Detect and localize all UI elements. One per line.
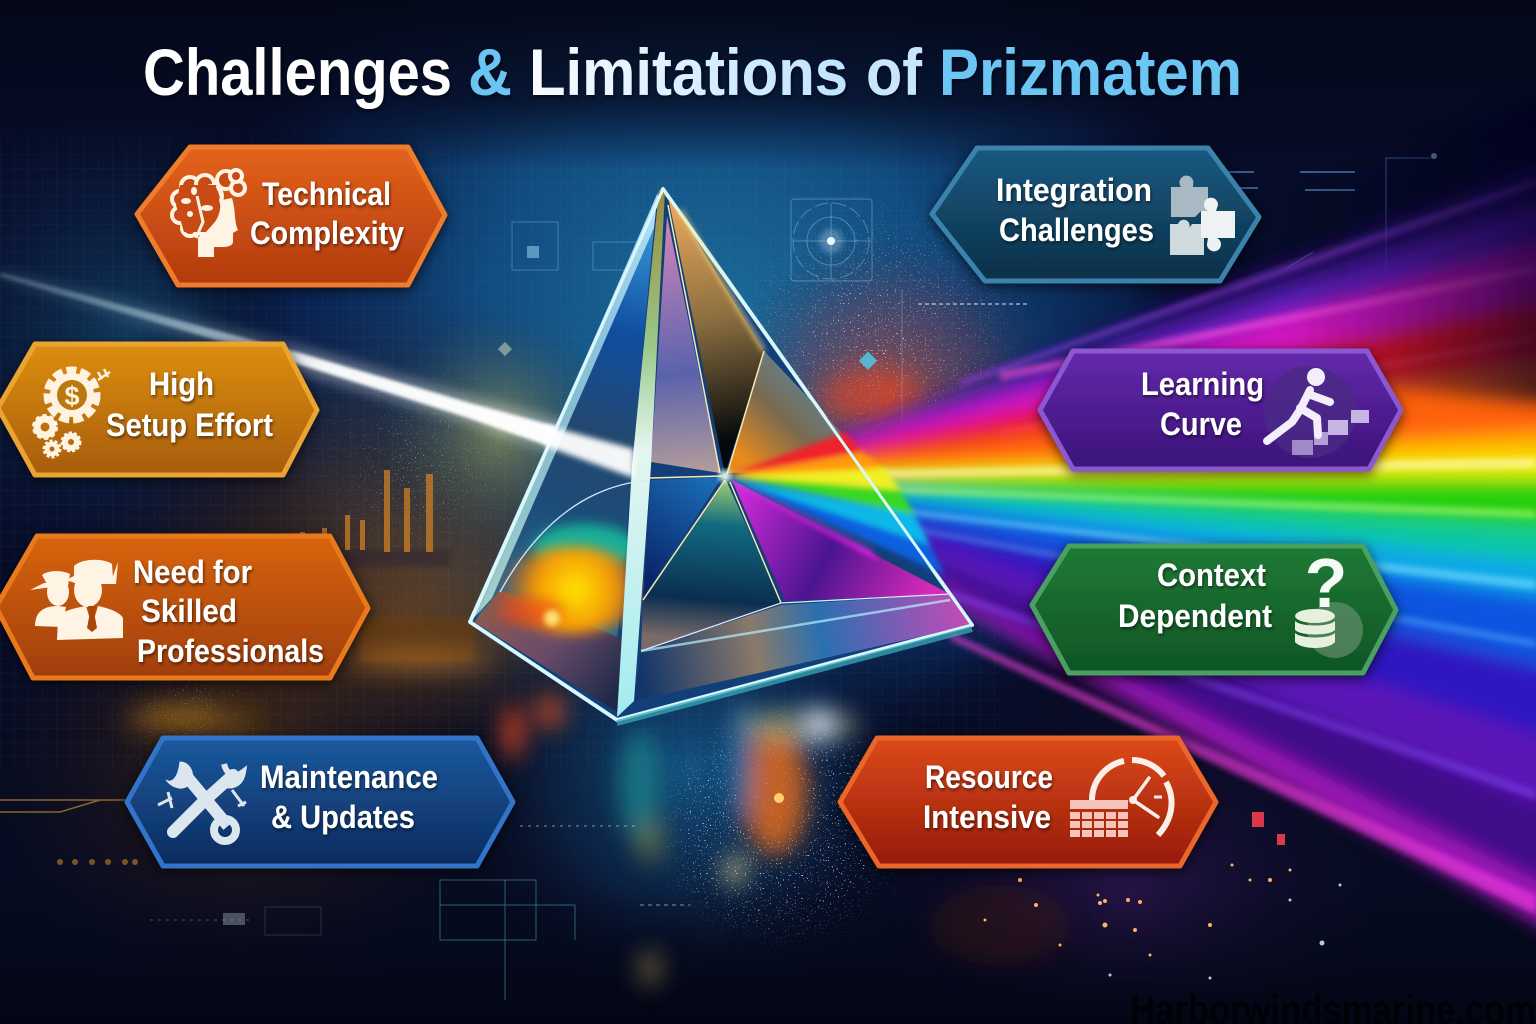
white incoming light beam [0, 266, 640, 482]
label: Integration [996, 172, 1152, 208]
panel: Need for Skilled Professionals: Professionals [137, 633, 324, 669]
prism: translucent base band [634, 594, 972, 701]
label: Maintenance [260, 759, 438, 795]
icon: gauge and calendar [1070, 760, 1172, 837]
ray streaks [820, 178, 1536, 914]
prism: bright edges [470, 189, 972, 723]
background chart bars [270, 470, 450, 566]
glass prism [470, 189, 972, 723]
white beam inside prism [545, 425, 634, 478]
panel: Technical Complexity [137, 147, 445, 285]
panel: Context Dependent [1032, 544, 1396, 673]
icon: person climbing stairs [1264, 366, 1369, 458]
panel: Learning Curve: Curve [1160, 406, 1242, 442]
floor glow and reflections [120, 369, 1070, 986]
label: Learning [1141, 366, 1264, 402]
prism: left rim [472, 192, 658, 620]
prism: front ridge band [617, 190, 665, 717]
HUD top right lines [1218, 153, 1437, 278]
icon: brain and head [172, 170, 245, 257]
panel: Need for Skilled Professionals: Skilled [141, 593, 237, 629]
title: Challenges [143, 35, 452, 109]
panel: Learning Curve [1040, 351, 1401, 469]
title: Limitations [529, 35, 848, 109]
label: Context [1157, 557, 1266, 593]
HUD small panels [498, 222, 1028, 470]
title: Prizmatem [939, 35, 1242, 109]
prism: lower left base facet [474, 590, 625, 712]
prism: gold rear facet [667, 192, 764, 474]
title: of [866, 35, 923, 109]
label: Resource [925, 759, 1053, 795]
icon: crossed wrench and screwdriver [158, 762, 246, 841]
icon: question mark and database: ? [1305, 544, 1347, 622]
panel: High Setup Effort [0, 344, 317, 475]
background sparks [0, 746, 1342, 980]
prism: right upper facet [727, 351, 862, 473]
prism: rainbow patch on left face [496, 524, 644, 634]
prism: bottom centre facet [641, 480, 781, 651]
panel: Resource Intensive [840, 738, 1216, 866]
prism: outer silhouette [470, 189, 972, 720]
panel: Integration Challenges [932, 148, 1259, 281]
title: & [468, 35, 512, 109]
prism: focal point [719, 470, 731, 482]
panel: Maintenance & Updates [127, 738, 513, 866]
panel: High Setup Effort: Setup Effort [106, 407, 273, 443]
label: Need for [133, 554, 252, 590]
HUD lower data panels [150, 826, 690, 1000]
prism: left face [476, 195, 657, 640]
prism: rainbow through glass [727, 432, 945, 575]
rainbow light rays [725, 60, 1536, 957]
panel: Maintenance & Updates: & Updates [271, 799, 415, 835]
icon: gears with dollar: $ [64, 381, 80, 411]
panel: Context Dependent: Dependent [1118, 598, 1272, 634]
panel: Need for Skilled Professionals [0, 536, 368, 678]
label: Technical [262, 176, 391, 212]
icon: puzzle pieces [1170, 176, 1235, 255]
panel: Technical Complexity: Complexity [250, 215, 404, 251]
prism: magenta facet [732, 480, 950, 601]
icon: professionals [30, 560, 123, 640]
panel: Integration Challenges: Challenges [999, 212, 1154, 248]
prism: lilac facet [651, 216, 720, 473]
icon: gears with dollar [34, 369, 110, 457]
HUD radar graphic [791, 199, 872, 281]
icon: question mark and database [1295, 544, 1363, 658]
title [143, 35, 1242, 109]
label: High [149, 366, 214, 402]
right edge dimming [1290, 60, 1536, 410]
panel: Resource Intensive: Intensive [923, 799, 1051, 835]
prism: dark blue facet [643, 477, 722, 598]
